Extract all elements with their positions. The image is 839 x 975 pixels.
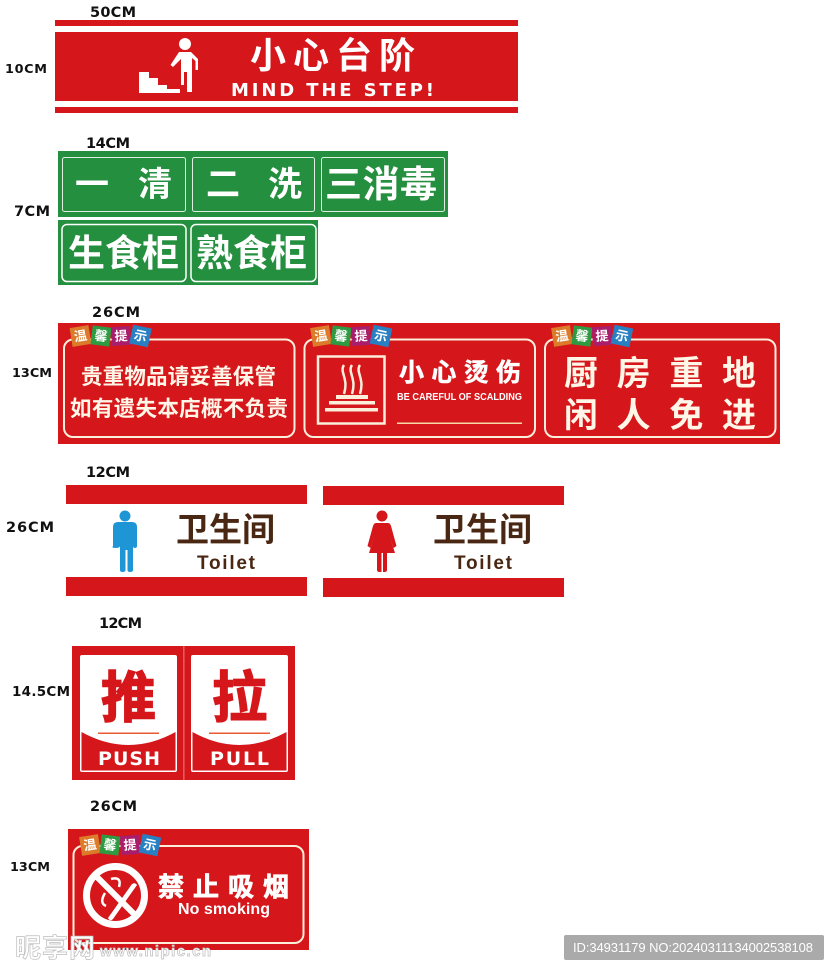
text: 三消毒: 三消毒: [325, 164, 437, 205]
badge: 温馨提示: 提: [114, 328, 128, 344]
badge: 温馨提示: [551, 325, 633, 347]
badge: 温馨提示: 温: [82, 837, 98, 853]
dimension label: 13CM: 13CM: [10, 860, 50, 875]
text: 熟食柜: 熟食柜: [196, 233, 307, 274]
text: PUSH: PUSH: [98, 748, 160, 770]
dimension label: 10CM: 10CM: [5, 62, 47, 77]
text: PULL: PULL: [210, 748, 269, 770]
text: Toilet: Toilet: [454, 553, 513, 574]
badge: 温馨提示: [79, 834, 161, 856]
icon: person climbing stairs: [139, 38, 198, 93]
sign: no smoking: [68, 829, 309, 950]
heading: 小心台阶: 小心台阶: [250, 35, 415, 76]
badge: 温馨提示: 示: [142, 836, 158, 854]
icon: no smoking symbol: [86, 866, 144, 924]
text: BE CAREFUL OF SCALDING: BE CAREFUL OF SCALDING: [397, 392, 522, 403]
badge: 温馨提示: 提: [595, 328, 609, 344]
dimension label: 7CM: 7CM: [14, 204, 50, 220]
watermark: nipic: [15, 933, 211, 963]
text: 卫生间: 卫生间: [433, 511, 532, 548]
dimension label: 26CM: 26CM: [90, 799, 137, 815]
text: Toilet: Toilet: [197, 553, 256, 574]
text: 一清: 一: [75, 166, 109, 204]
icon: woman: [368, 510, 396, 572]
dimension label: 26CM: 26CM: [6, 520, 54, 536]
text: 厨房重地: 厨房重地: [564, 355, 756, 393]
badge: 温馨提示: [70, 325, 152, 347]
text: 生食柜: 生食柜: [68, 233, 179, 274]
text: 拉: 拉: [212, 667, 267, 729]
text: No smoking: No smoking: [178, 901, 270, 918]
subheading: MIND THE STEP: MIND THE STEP!: [231, 80, 434, 101]
sign: mind the step: [55, 20, 518, 113]
text: 二洗: 二: [206, 166, 240, 204]
text: 卫生间: 卫生间: [176, 511, 275, 548]
watermark: nipic: www.nipic.cn: [99, 943, 211, 960]
text: 小心烫伤: 小心烫伤: [399, 359, 521, 387]
badge: 温馨提示: 馨: [575, 328, 589, 344]
badge: 温馨提示: 馨: [103, 837, 117, 853]
sign: women's toilet: [323, 486, 564, 597]
dimension label: 12CM: 12CM: [99, 616, 142, 632]
sign: push and pull: [72, 646, 295, 780]
dimension label: 50CM: 50CM: [90, 5, 136, 21]
dimension label: 14.5CM: 14.5CM: [12, 684, 70, 700]
badge: 温馨提示: 提: [354, 328, 368, 344]
dimension label: 12CM: 12CM: [86, 465, 130, 481]
badge: 温馨提示: 馨: [94, 328, 108, 344]
image id bar: ID:34931179 NO:20240311134002538108: [573, 940, 813, 955]
badge: 温馨提示: 温: [313, 328, 329, 344]
badge: 温馨提示: 示: [373, 327, 389, 345]
dimension label: 13CM: 13CM: [12, 366, 52, 381]
badge: 温馨提示: 提: [123, 837, 137, 853]
text: 禁止吸烟: 禁止吸烟: [158, 872, 289, 902]
text: 一清: 清: [138, 166, 172, 204]
sign: green cabinets: [58, 220, 318, 285]
panel: pull: [191, 655, 288, 772]
text: 推: 推: [101, 667, 156, 729]
badge: 温馨提示: 示: [133, 327, 148, 345]
text: valuables line 2: 如有遗失本店概不负责: [70, 397, 288, 421]
icon: man: [112, 510, 137, 572]
text: valuables line 1: 贵重物品请妥善保管: [81, 365, 276, 389]
text: 闲人免进: 闲人免进: [564, 397, 756, 435]
sign: kitchen notice strip: [58, 323, 780, 444]
image id bar: [564, 935, 824, 960]
sign: men's toilet: [66, 485, 307, 596]
badge: 温馨提示: 馨: [334, 328, 348, 344]
badge: 温馨提示: 温: [73, 328, 88, 344]
sign: green wash steps: [58, 151, 448, 217]
text: 二洗: 洗: [268, 166, 302, 204]
panel: push: [80, 655, 177, 772]
badge: 温馨提示: 温: [554, 328, 570, 344]
badge: 温馨提示: [310, 325, 392, 347]
badge: 温馨提示: 示: [614, 327, 630, 345]
dimension label: 14CM: 14CM: [86, 136, 130, 152]
watermark: nipic: 昵享网: [15, 933, 95, 963]
dimension label: 26CM: 26CM: [92, 305, 140, 321]
icon: hot surface: [318, 356, 384, 424]
